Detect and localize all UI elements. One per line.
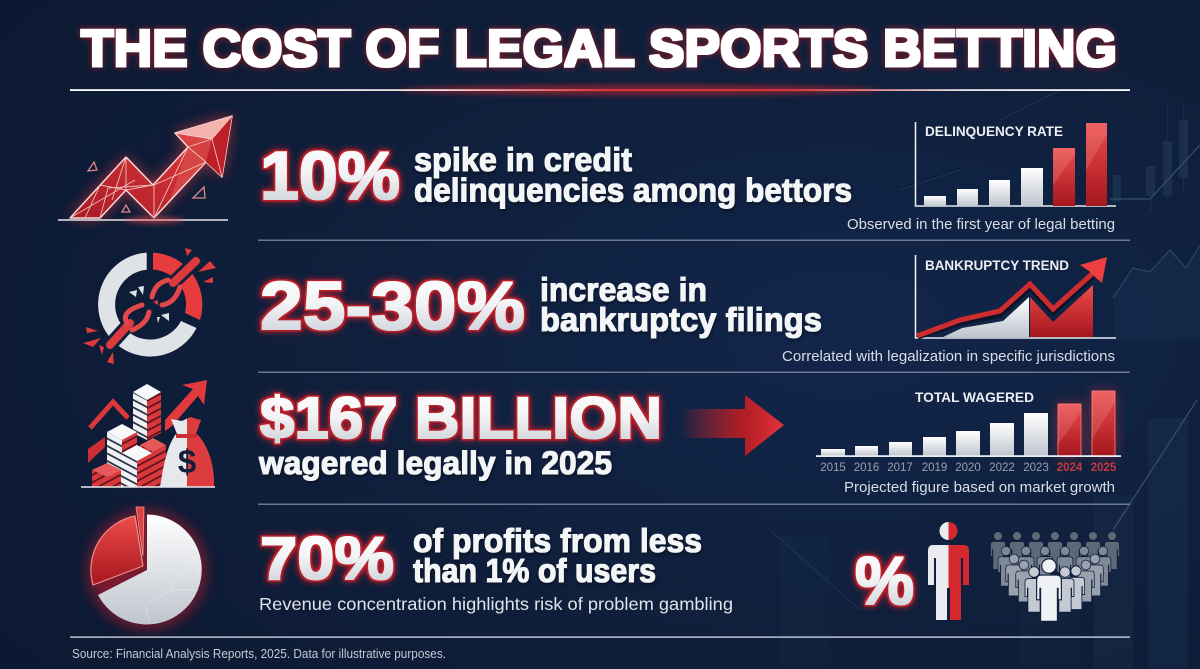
chart: bankruptcy trend: BANKRUPTCY TREND: [925, 258, 1069, 273]
icon: money stacks and bag: [81, 380, 215, 487]
row 1: credit delinquencies: [58, 116, 1116, 233]
icon: broken chain ring: [83, 248, 216, 364]
icon: crowd: [990, 532, 1120, 621]
caption: Correlated with legalization in specific jurisdictions: [782, 348, 1115, 365]
chart: total wagered: TOTAL WAGERED: [915, 390, 1034, 405]
icon: percent sign: %: [855, 543, 914, 619]
caption: Observed in the first year of legal betting: [847, 216, 1115, 233]
icon: pie chart: [88, 507, 206, 629]
chart: total wagered: [816, 390, 1121, 474]
chart: delinquency rate: DELINQUENCY RATE: [925, 124, 1063, 139]
text: spike in credit delinquencies: [414, 141, 852, 208]
text: increase in bankruptcy filings: [540, 271, 822, 338]
title: THE COST OF LEGAL SPORTS BETTING: [81, 20, 1117, 78]
text: of profits from less than 1% of users: [413, 522, 702, 589]
caption: Revenue concentration highlights risk of problem gambling: [259, 594, 733, 614]
chart: delinquency rate: [916, 122, 1116, 206]
icon: money stacks and bag: $: [178, 443, 196, 480]
text: spike in credit delinquencies: delinquencies among bettors: [414, 172, 852, 208]
stat: 10%: 10%: [260, 138, 400, 214]
chart: total wagered: 2024: [1057, 462, 1083, 474]
text: of profits from less than 1% of users: than 1% of users: [413, 552, 656, 589]
chart: total wagered: 2019: [922, 462, 947, 474]
chart: bankruptcy trend: [916, 255, 1116, 338]
text: of profits from less than 1% of users: of profits from less: [413, 522, 702, 559]
stat: 25-30%: 25-30%: [260, 268, 525, 344]
title underline: [70, 85, 1130, 95]
stat: $167 billion: $167 BILLION: [260, 386, 662, 451]
chart: total wagered: 2022: [989, 462, 1015, 474]
row 3: total wagered: [81, 380, 1121, 496]
text: increase in bankruptcy filings: increase in: [540, 271, 707, 308]
source note: Source: Financial Analysis Reports, 2025. Data for illustrative purposes.: [72, 646, 446, 661]
chart: total wagered: 2025: [1091, 462, 1117, 474]
chart: total wagered: 2017: [887, 462, 913, 474]
chart: total wagered: 2023: [1023, 462, 1049, 474]
chart: total wagered: 2016: [854, 462, 879, 474]
stat: 70%: 70%: [260, 525, 394, 592]
arrow: [680, 395, 784, 456]
row 4: profit concentration: [88, 507, 1120, 629]
icon: rising polygon arrow: [58, 116, 232, 223]
chart: total wagered: 2015: [820, 462, 846, 474]
icon: highlighted person: [928, 522, 969, 620]
text: spike in credit delinquencies: spike in credit: [414, 141, 632, 178]
caption: Projected figure based on market growth: [844, 479, 1115, 496]
text: wagered legally in 2025: wagered legally in 2025: [258, 445, 612, 481]
chart: total wagered: 2020: [955, 462, 981, 474]
text: increase in bankruptcy filings: bankruptcy filings: [540, 301, 822, 338]
row 2: bankruptcy filings: [83, 248, 1116, 365]
